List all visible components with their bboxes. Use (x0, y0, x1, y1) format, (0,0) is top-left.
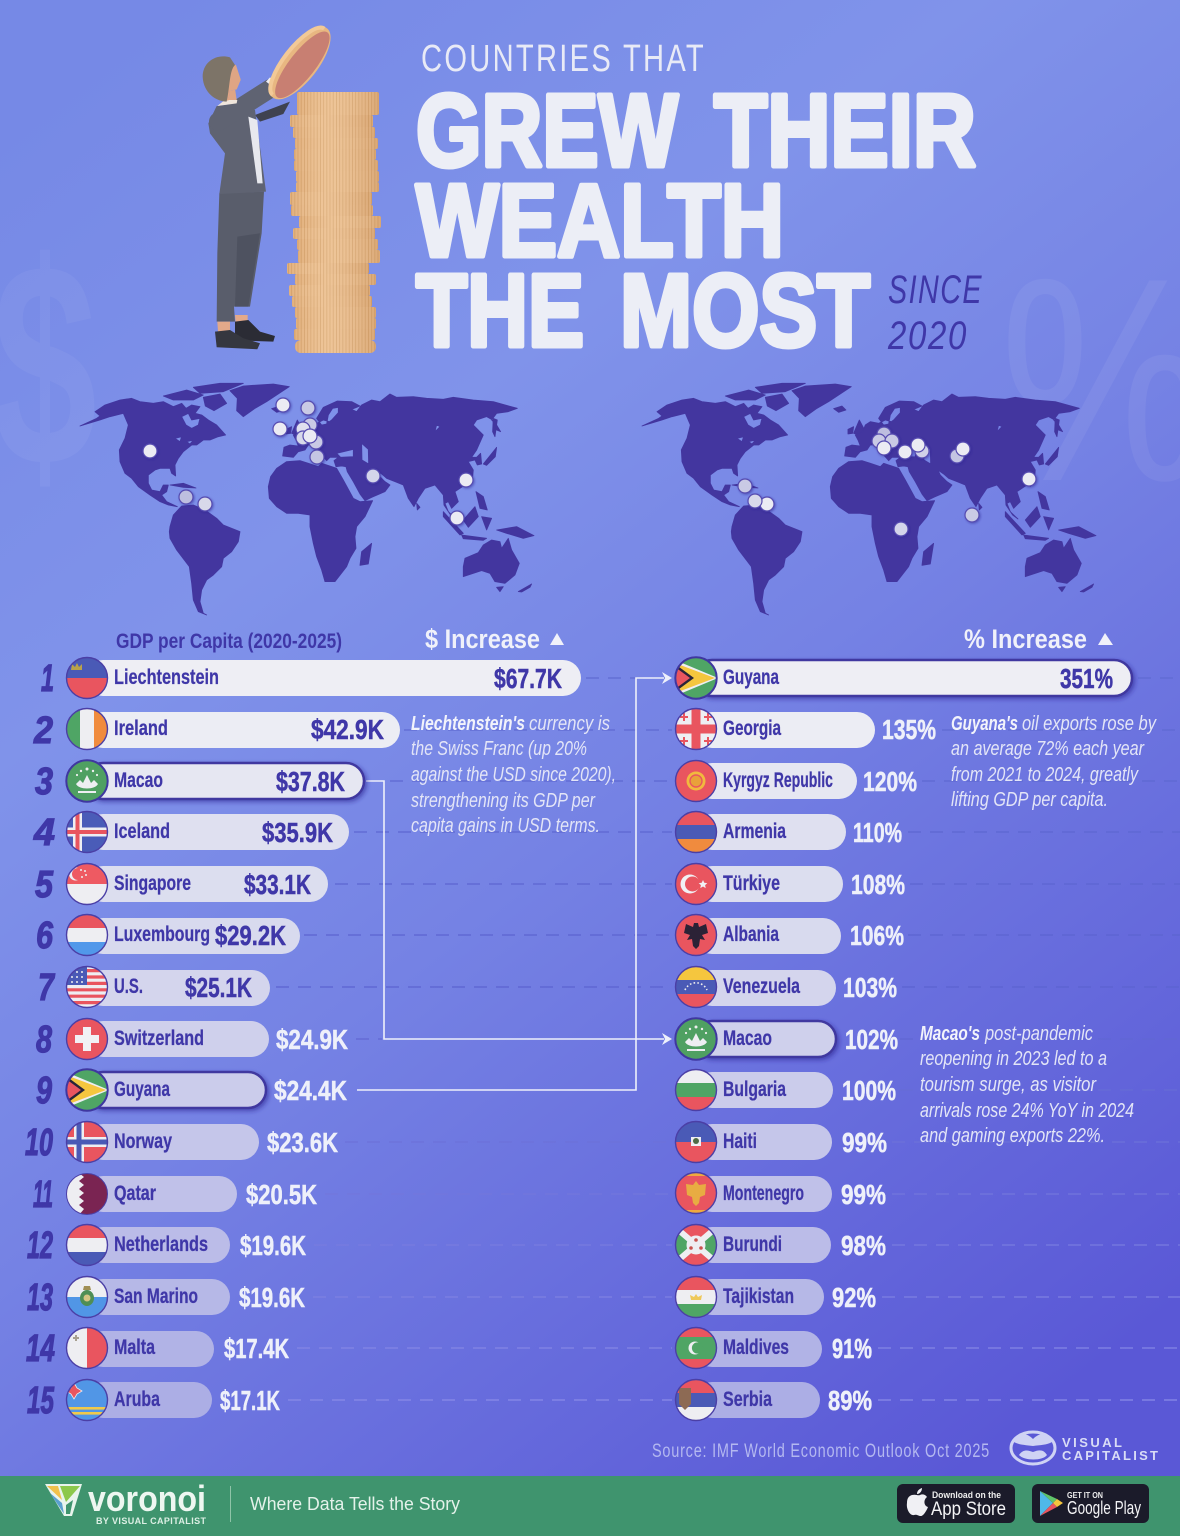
row 6 Luxembourg (36, 914, 300, 957)
map markers: dollar increase countries (143, 398, 473, 525)
wordmark: capitalist: CAPITALIST (1062, 1448, 1158, 1463)
row 7 U.S.: 7 (38, 967, 55, 1009)
title suffix: 2020: 2020 (887, 314, 968, 358)
row Burundi (675, 1224, 886, 1266)
row 10 Norway (25, 1121, 338, 1164)
row Armenia: 110% (853, 817, 902, 848)
icon: visual capitalist mark (1011, 1432, 1055, 1464)
row 13 San Marino: 13 (27, 1277, 53, 1319)
row Montenegro (675, 1172, 886, 1214)
row Macao highlighted: 102% (845, 1024, 898, 1055)
row Kyrgyz Republic (676, 760, 917, 802)
row 12 Netherlands: Netherlands (114, 1233, 208, 1256)
row Venezuela (675, 966, 897, 1008)
badge: google play (1032, 1484, 1149, 1523)
row 2 Ireland: $42.9K (311, 714, 384, 745)
row 15 Aruba (27, 1379, 280, 1422)
callout: Liechtenstein (411, 713, 616, 837)
badge: app store: App Store (931, 1499, 1006, 1520)
row 11 Qatar: $20.5K (246, 1179, 317, 1210)
row Tajikistan: 92% (832, 1282, 876, 1313)
row 3 Macao highlighted: $37.8K (276, 766, 345, 797)
row Tajikistan (675, 1276, 876, 1318)
row 11 Qatar (33, 1173, 317, 1216)
row 9 Guyana highlighted: Guyana (114, 1078, 170, 1101)
panel: percent increase ranking (675, 657, 1132, 1421)
row 10 Norway: Norway (114, 1130, 172, 1153)
row 9 Guyana highlighted: $24.4K (274, 1075, 347, 1106)
connector arrow: guyana (357, 672, 672, 1090)
callout: Macao: and gaming exports 22%. (920, 1125, 1105, 1147)
row Guyana highlighted (675, 657, 1132, 699)
badge: google play: Google Play (1067, 1498, 1141, 1518)
row Tajikistan: Tajikistan (723, 1285, 794, 1308)
callout: Liechtenstein: Liechtenstein's (411, 713, 525, 735)
row 8 Switzerland: Switzerland (114, 1027, 204, 1050)
title line: the most: THE (416, 253, 584, 368)
row Armenia: Armenia (723, 820, 786, 843)
connector arrow: macao (366, 781, 672, 1045)
row Venezuela: 103% (843, 972, 897, 1003)
row Haiti: Haiti (723, 1130, 757, 1153)
logo: voronoi mark (45, 1484, 82, 1516)
title line: grew their (416, 73, 976, 188)
row 8 Switzerland: $24.9K (276, 1024, 348, 1055)
row Georgia (675, 708, 936, 750)
row Serbia (675, 1379, 872, 1421)
row Bulgaria (675, 1069, 896, 1111)
row 10 Norway: 10 (25, 1122, 53, 1164)
header: gdp per capita: GDP per Capita (2020-2025) (116, 630, 342, 653)
row 10 Norway: $23.6K (267, 1127, 338, 1158)
row 2 Ireland (33, 708, 400, 752)
row Guyana highlighted: Guyana (723, 666, 779, 689)
row Türkiye (676, 864, 905, 904)
row Venezuela: Venezuela (723, 975, 800, 998)
row Guyana highlighted: 351% (1060, 663, 1113, 694)
row 4 Iceland (33, 811, 349, 854)
row 3 Macao highlighted (35, 760, 364, 803)
title line: the most (416, 253, 870, 368)
row 9 Guyana highlighted: 9 (36, 1070, 52, 1112)
row Albania: Albania (723, 923, 779, 946)
row 14 Malta (26, 1327, 289, 1370)
row 13 San Marino: $19.6K (239, 1282, 305, 1313)
title line: wealth: WEALTH (416, 163, 784, 278)
row 15 Aruba: Aruba (114, 1388, 160, 1411)
row 8 Switzerland: 8 (36, 1019, 53, 1061)
row 15 Aruba: $17.1K (220, 1385, 280, 1416)
title suffix: since: SINCE (888, 268, 983, 312)
callout: Liechtenstein: the Swiss Franc (up 20% (411, 738, 587, 760)
row 1 Liechtenstein: $67.7K (494, 663, 562, 694)
world map: dollar increase (80, 383, 534, 615)
row Montenegro: 99% (841, 1179, 886, 1210)
callout: Macao: reopening in 2023 led to a (920, 1048, 1107, 1070)
row 1 Liechtenstein: 1 (41, 658, 54, 700)
row Haiti (675, 1121, 887, 1163)
row 5 Singapore: Singapore (114, 872, 191, 895)
row 15 Aruba: 15 (27, 1380, 55, 1422)
row Macao highlighted (675, 1018, 898, 1060)
illustration: businesswoman stacking coins (203, 17, 381, 353)
row Armenia (675, 811, 902, 853)
row 6 Luxembourg: 6 (36, 915, 54, 957)
map markers: percent increase countries (738, 427, 1036, 536)
header: dollar increase: $ Increase (425, 624, 540, 654)
source line: Source: IMF World Economic Outlook Oct 2025 (652, 1441, 990, 1462)
row 7 U.S. (38, 966, 270, 1009)
panel: dollar increase ranking (25, 657, 581, 1422)
icon: coin held aloft (259, 17, 341, 109)
callout: Macao: arrivals rose 24% YoY in 2024 (920, 1100, 1134, 1122)
row 11 Qatar: 11 (33, 1174, 53, 1216)
row Macao highlighted: Macao (723, 1027, 772, 1050)
row Georgia: Georgia (723, 717, 781, 740)
row 1 Liechtenstein (41, 657, 581, 700)
world map: percent increase (642, 383, 1096, 615)
callout: Guyana: oil exports rose by (1022, 713, 1157, 735)
wordmark: voronoi: voronoi (88, 1478, 206, 1519)
wordmark: visual: VISUAL (1062, 1435, 1122, 1450)
callout: Liechtenstein: currency is (529, 713, 610, 735)
row 2 Ireland: Ireland (114, 717, 168, 740)
callout: Liechtenstein: against the USD since 2020), (411, 764, 616, 786)
row Albania: 106% (850, 920, 904, 951)
row 6 Luxembourg: Luxembourg (114, 923, 210, 946)
row Kyrgyz Republic: Kyrgyz Republic (723, 769, 833, 792)
row 9 Guyana highlighted (36, 1069, 347, 1112)
row 5 Singapore: $33.1K (244, 869, 311, 900)
badge: app store: Download on the (932, 1490, 1001, 1500)
icon: businesswoman (203, 56, 293, 349)
row 13 San Marino (27, 1276, 305, 1319)
callout: Macao: post-pandemic (984, 1023, 1093, 1045)
callout: Liechtenstein: strengthening its GDP per (411, 790, 596, 812)
row 14 Malta: 14 (26, 1328, 55, 1370)
row Serbia: Serbia (723, 1388, 772, 1411)
row 13 San Marino: San Marino (114, 1285, 198, 1308)
row Georgia: 135% (882, 714, 936, 745)
row Maldives (675, 1327, 872, 1369)
row 12 Netherlands: $19.6K (240, 1230, 306, 1261)
row Maldives: Maldives (723, 1336, 789, 1359)
row 14 Malta: $17.4K (224, 1333, 289, 1364)
title line: the most: MOST (620, 253, 870, 368)
row Serbia: 89% (828, 1385, 872, 1416)
row Türkiye: 108% (851, 869, 905, 900)
row 2 Ireland: 2 (33, 710, 53, 752)
title line: grew their: THEIR (714, 73, 976, 188)
callout: Guyana: from 2021 to 2024, greatly (951, 764, 1139, 786)
row 14 Malta: Malta (114, 1336, 155, 1359)
row Bulgaria: 100% (842, 1075, 896, 1106)
row 7 U.S.: $25.1K (185, 972, 252, 1003)
row 6 Luxembourg: $29.2K (215, 920, 286, 951)
title kicker: countries that: COUNTRIES THAT (421, 38, 706, 80)
row 3 Macao highlighted: Macao (114, 769, 163, 792)
title line: grew their: GREW (416, 73, 679, 188)
header: percent increase: % Increase (964, 624, 1087, 654)
footer band (0, 1476, 1180, 1536)
row Kyrgyz Republic: 120% (863, 766, 917, 797)
row 3 Macao highlighted: 3 (35, 761, 53, 803)
row Maldives: 91% (832, 1333, 872, 1364)
callout: Macao (920, 1023, 1134, 1147)
callout: Liechtenstein: capita gains in USD terms. (411, 815, 600, 837)
row 5 Singapore (35, 863, 328, 906)
row 11 Qatar: Qatar (114, 1182, 156, 1205)
callout: Macao: tourism surge, as visitor (920, 1074, 1097, 1096)
wordmark: by visual capitalist: BY VISUAL CAPITALIST (96, 1516, 206, 1526)
logo: visual capitalist (1011, 1432, 1158, 1464)
icon: coin stack (287, 92, 381, 353)
callout: Guyana: lifting GDP per capita. (951, 789, 1108, 811)
row Burundi: Burundi (723, 1233, 782, 1256)
row Montenegro: Montenegro (723, 1182, 804, 1205)
tagline: Where Data Tells the Story (250, 1494, 460, 1514)
row Albania (676, 914, 904, 956)
row 4 Iceland: $35.9K (262, 817, 333, 848)
row Bulgaria: Bulgaria (723, 1078, 786, 1101)
callout: Macao: Macao's (920, 1023, 980, 1045)
callout: Guyana: Guyana's (951, 713, 1018, 735)
row 1 Liechtenstein: Liechtenstein (114, 666, 219, 689)
row Haiti: 99% (842, 1127, 887, 1158)
row 12 Netherlands: 12 (27, 1225, 53, 1267)
row 8 Switzerland (36, 1018, 348, 1061)
row Türkiye: Türkiye (723, 872, 780, 895)
row 7 U.S.: U.S. (114, 975, 143, 998)
badge: google play: GET IT ON (1067, 1491, 1103, 1500)
callout: Guyana (951, 713, 1157, 811)
badge: app store (897, 1484, 1015, 1523)
row 4 Iceland: 4 (33, 812, 55, 854)
title block (416, 38, 983, 368)
row 4 Iceland: Iceland (114, 820, 170, 843)
row 5 Singapore: 5 (35, 864, 54, 906)
row 12 Netherlands (27, 1224, 306, 1267)
row Burundi: 98% (841, 1230, 886, 1261)
